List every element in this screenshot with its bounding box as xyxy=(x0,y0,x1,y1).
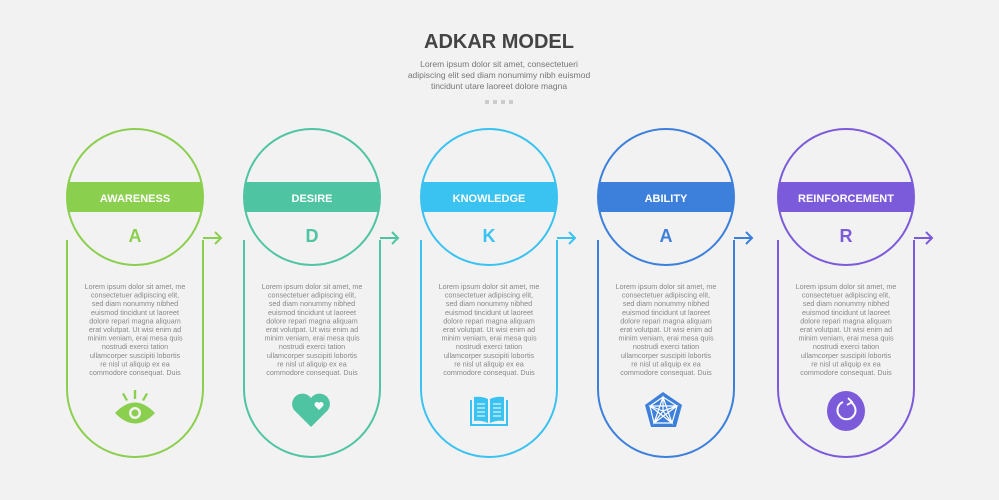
panel: knowledge xyxy=(421,129,575,457)
panel: awareness xyxy=(67,129,221,457)
icon: eye xyxy=(115,390,155,424)
panel: reinforcement: R xyxy=(840,226,852,246)
subtitle xyxy=(408,59,590,91)
panel: ability: ABILITY xyxy=(645,193,688,205)
panel: awareness: AWARENESS xyxy=(100,193,170,205)
panel: reinforcement xyxy=(778,129,932,457)
subtitle: Lorem ipsum dolor sit amet, consectetueri xyxy=(420,59,578,69)
subtitle: tincidunt utare laoreet dolore magna xyxy=(431,81,567,91)
panel: desire: DESIRE xyxy=(292,193,332,205)
panel: knowledge: KNOWLEDGE xyxy=(453,193,525,205)
panel: reinforcement: REINFORCEMENT xyxy=(798,193,894,205)
title: ADKAR MODEL xyxy=(424,31,574,53)
panel: ability: A xyxy=(660,226,672,246)
panel: awareness: A xyxy=(128,226,142,246)
panel: desire: D xyxy=(306,226,318,246)
icon: refresh xyxy=(827,391,865,431)
panel: knowledge: K xyxy=(482,226,496,246)
icon: pentagon xyxy=(645,392,682,427)
dots xyxy=(485,100,513,104)
icon: heart xyxy=(292,394,330,427)
panel: desire xyxy=(244,129,398,457)
panel: ability xyxy=(598,129,752,457)
icon: book xyxy=(470,397,508,426)
subtitle: adipiscing elit sed diam nonumimy nibh euismod xyxy=(408,70,590,80)
